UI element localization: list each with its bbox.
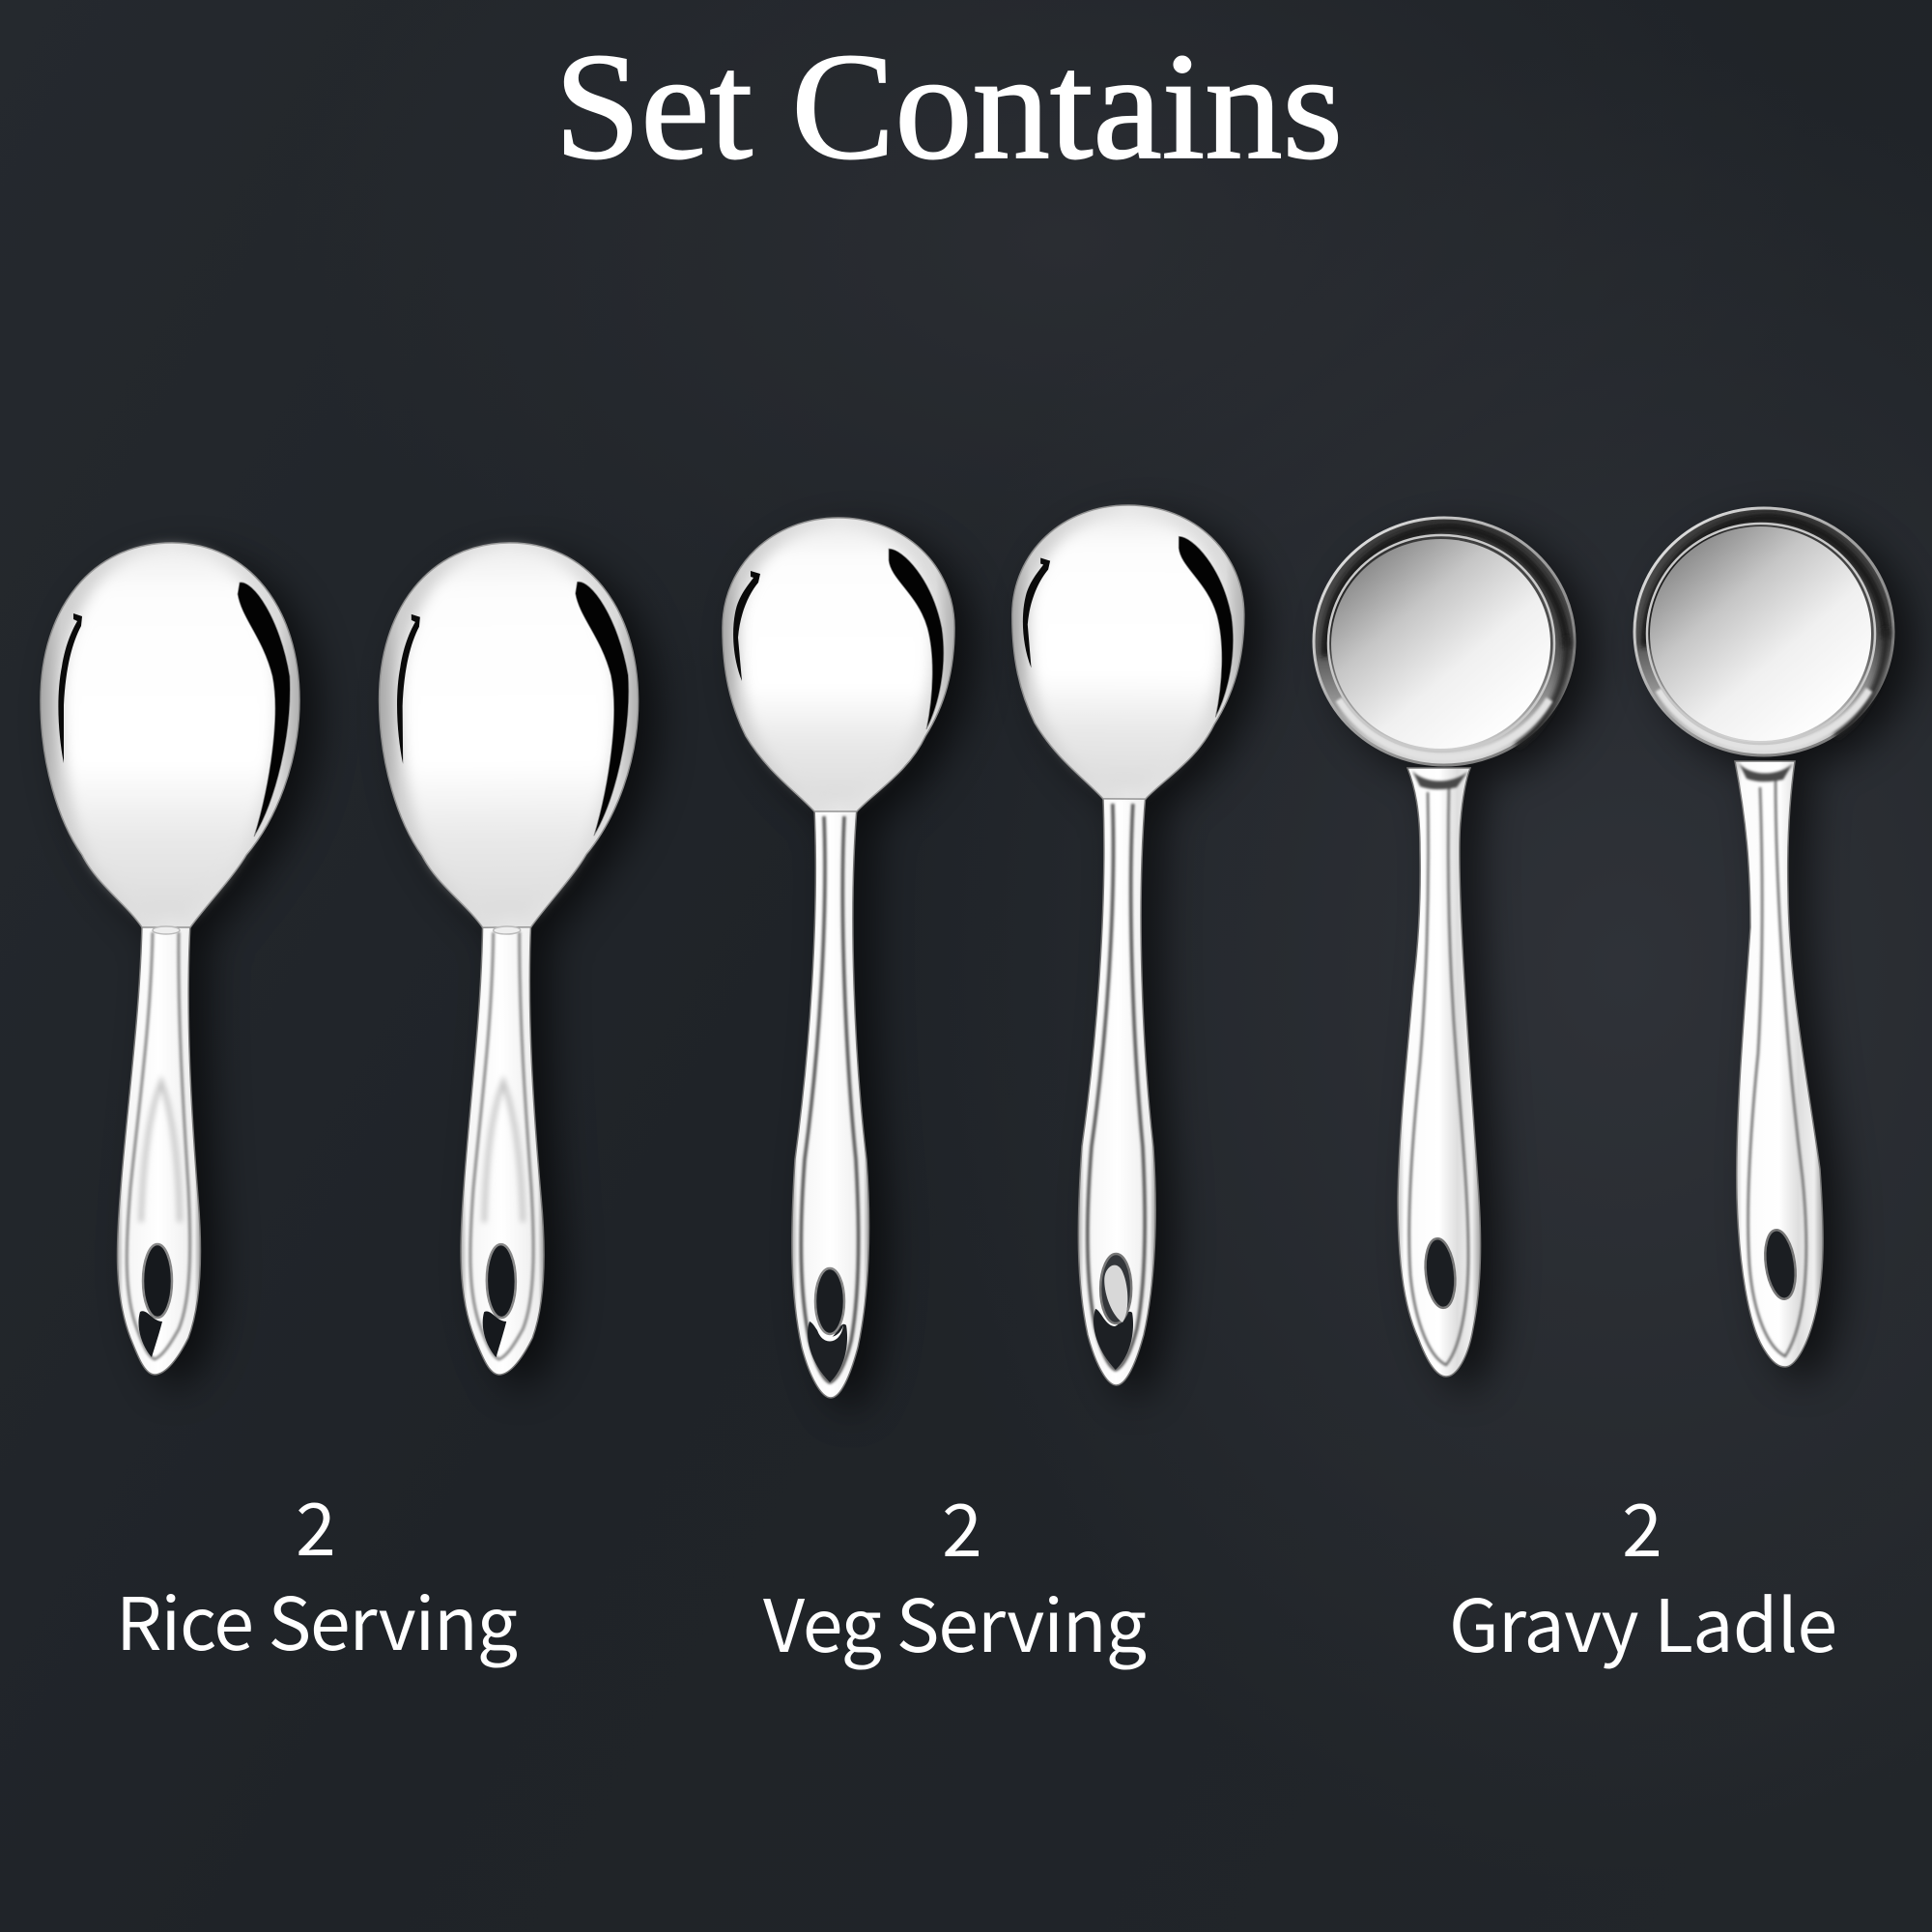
- label: veg serving: Veg Serving: [763, 1568, 1147, 1673]
- label: gravy ladle: [1449, 1472, 1837, 1673]
- label: veg serving: [763, 1472, 1147, 1673]
- label: rice serving: [116, 1471, 518, 1671]
- label: rice serving: 2: [296, 1471, 336, 1577]
- spoon: veg serving 1: [723, 518, 974, 1411]
- title: Set Contains: [554, 22, 1343, 191]
- label: rice serving: Rice Serving: [116, 1566, 518, 1671]
- label: veg serving: 2: [942, 1472, 982, 1577]
- label: gravy ladle: Gravy Ladle: [1449, 1568, 1837, 1673]
- spoon: rice serving 1: [41, 543, 319, 1388]
- spoon: veg serving 2: [1009, 504, 1264, 1400]
- label: gravy ladle: 2: [1622, 1472, 1662, 1577]
- spoon: rice serving 2: [378, 542, 664, 1389]
- ladle: gravy 2: [1634, 508, 1914, 1380]
- ladle: gravy 1: [1314, 518, 1594, 1390]
